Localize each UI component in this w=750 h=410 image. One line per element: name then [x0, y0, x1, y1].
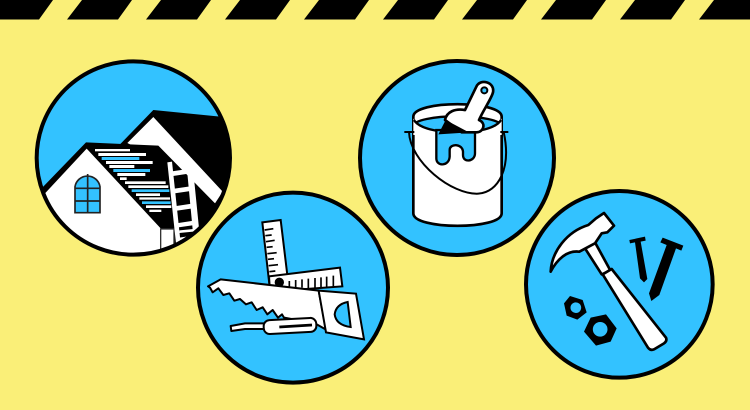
nail small	[629, 237, 647, 282]
icon: roof and house badge	[37, 61, 243, 262]
bucket body	[413, 104, 502, 226]
saw blade and handle	[208, 279, 364, 339]
carpenter square horizontal arm	[269, 268, 342, 292]
ladder	[167, 158, 199, 243]
hex nut small	[564, 296, 587, 320]
icon: hammer, nails and nuts badge	[526, 191, 713, 378]
paintbrush	[438, 82, 493, 134]
icon: saw, square and screwdriver badge	[198, 193, 388, 383]
carpenter square vertical arm	[262, 220, 287, 284]
hex nut large	[584, 314, 617, 346]
front house gable	[45, 148, 161, 253]
back house	[120, 110, 228, 205]
paint drip	[436, 130, 475, 164]
screwdriver	[231, 318, 317, 334]
bucket handle	[404, 132, 508, 194]
paint surface	[414, 116, 501, 134]
hammer	[551, 213, 666, 350]
roof shingles	[95, 149, 171, 212]
nail large	[649, 238, 683, 301]
window	[75, 174, 100, 213]
icon: paint bucket and brush badge	[360, 61, 554, 255]
hazard stripe band	[0, 0, 750, 20]
rim lower white	[413, 118, 502, 135]
front house roof	[43, 142, 215, 212]
